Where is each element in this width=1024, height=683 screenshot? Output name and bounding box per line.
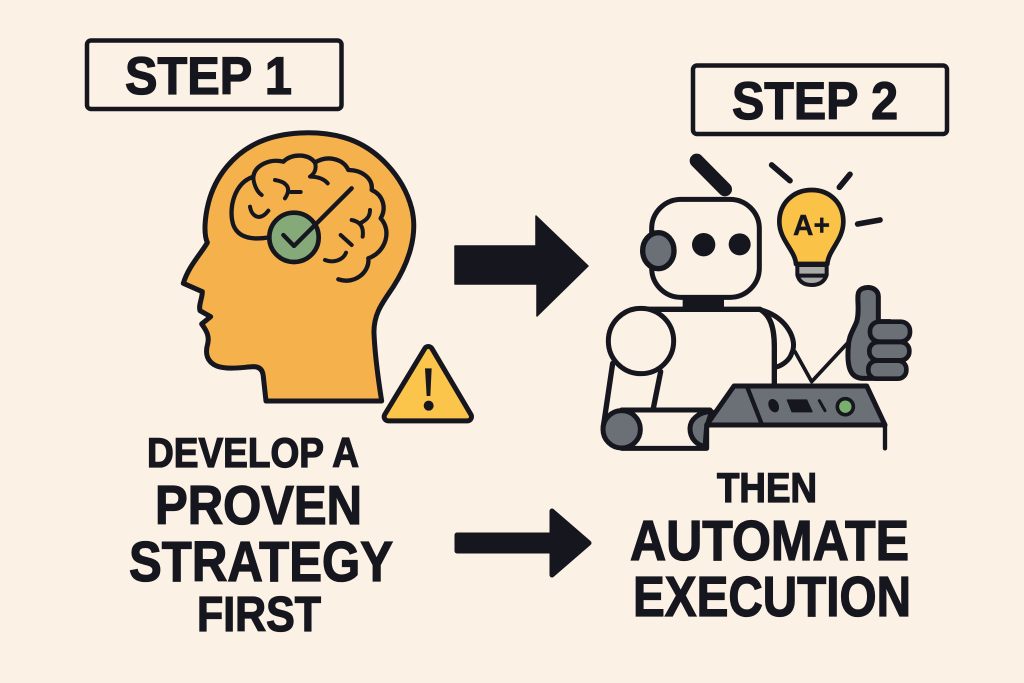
torso [640, 309, 774, 385]
neck [683, 295, 724, 310]
link lines to hand [795, 344, 847, 382]
bulb grade label: A+ [793, 210, 830, 242]
ear [643, 233, 674, 269]
brain folds [250, 163, 370, 261]
arrow: bottom [457, 511, 589, 575]
wrist joint [690, 412, 712, 447]
antenna [697, 161, 725, 189]
step 1 badge: STEP 1 [125, 47, 292, 106]
check mark [283, 188, 352, 246]
icon: head with brain and check [183, 133, 414, 401]
left caption: DEVELOP A [147, 429, 359, 476]
elbow joint [603, 411, 640, 448]
robot head [652, 199, 759, 297]
console divider and legs [747, 387, 885, 448]
head silhouette [183, 133, 414, 401]
arm links [603, 363, 661, 427]
icon: robot with console [603, 161, 910, 448]
right caption: EXECUTION [633, 565, 911, 629]
thumbs up hand [848, 287, 910, 379]
left caption: FIRST [197, 588, 321, 642]
eyes [692, 233, 751, 256]
light rays [772, 165, 880, 224]
light bulb [779, 190, 843, 285]
left shoulder joint [608, 308, 674, 374]
right caption: THEN [717, 464, 817, 511]
brain outline [232, 156, 386, 281]
arrow: top [455, 216, 588, 316]
step 2 badge [693, 66, 947, 134]
step 1 badge [87, 40, 342, 109]
console controls [766, 397, 853, 415]
step 2 badge: STEP 2 [732, 72, 898, 131]
right shoulder [763, 311, 794, 367]
forearm [622, 410, 710, 448]
right caption [630, 464, 911, 629]
check badge [269, 213, 319, 262]
right caption: AUTOMATE [630, 509, 909, 573]
icon: warning triangle [388, 351, 467, 417]
console [707, 386, 885, 425]
left caption [129, 429, 393, 642]
left caption: PROVEN [155, 474, 362, 536]
left caption: STRATEGY [129, 530, 393, 594]
